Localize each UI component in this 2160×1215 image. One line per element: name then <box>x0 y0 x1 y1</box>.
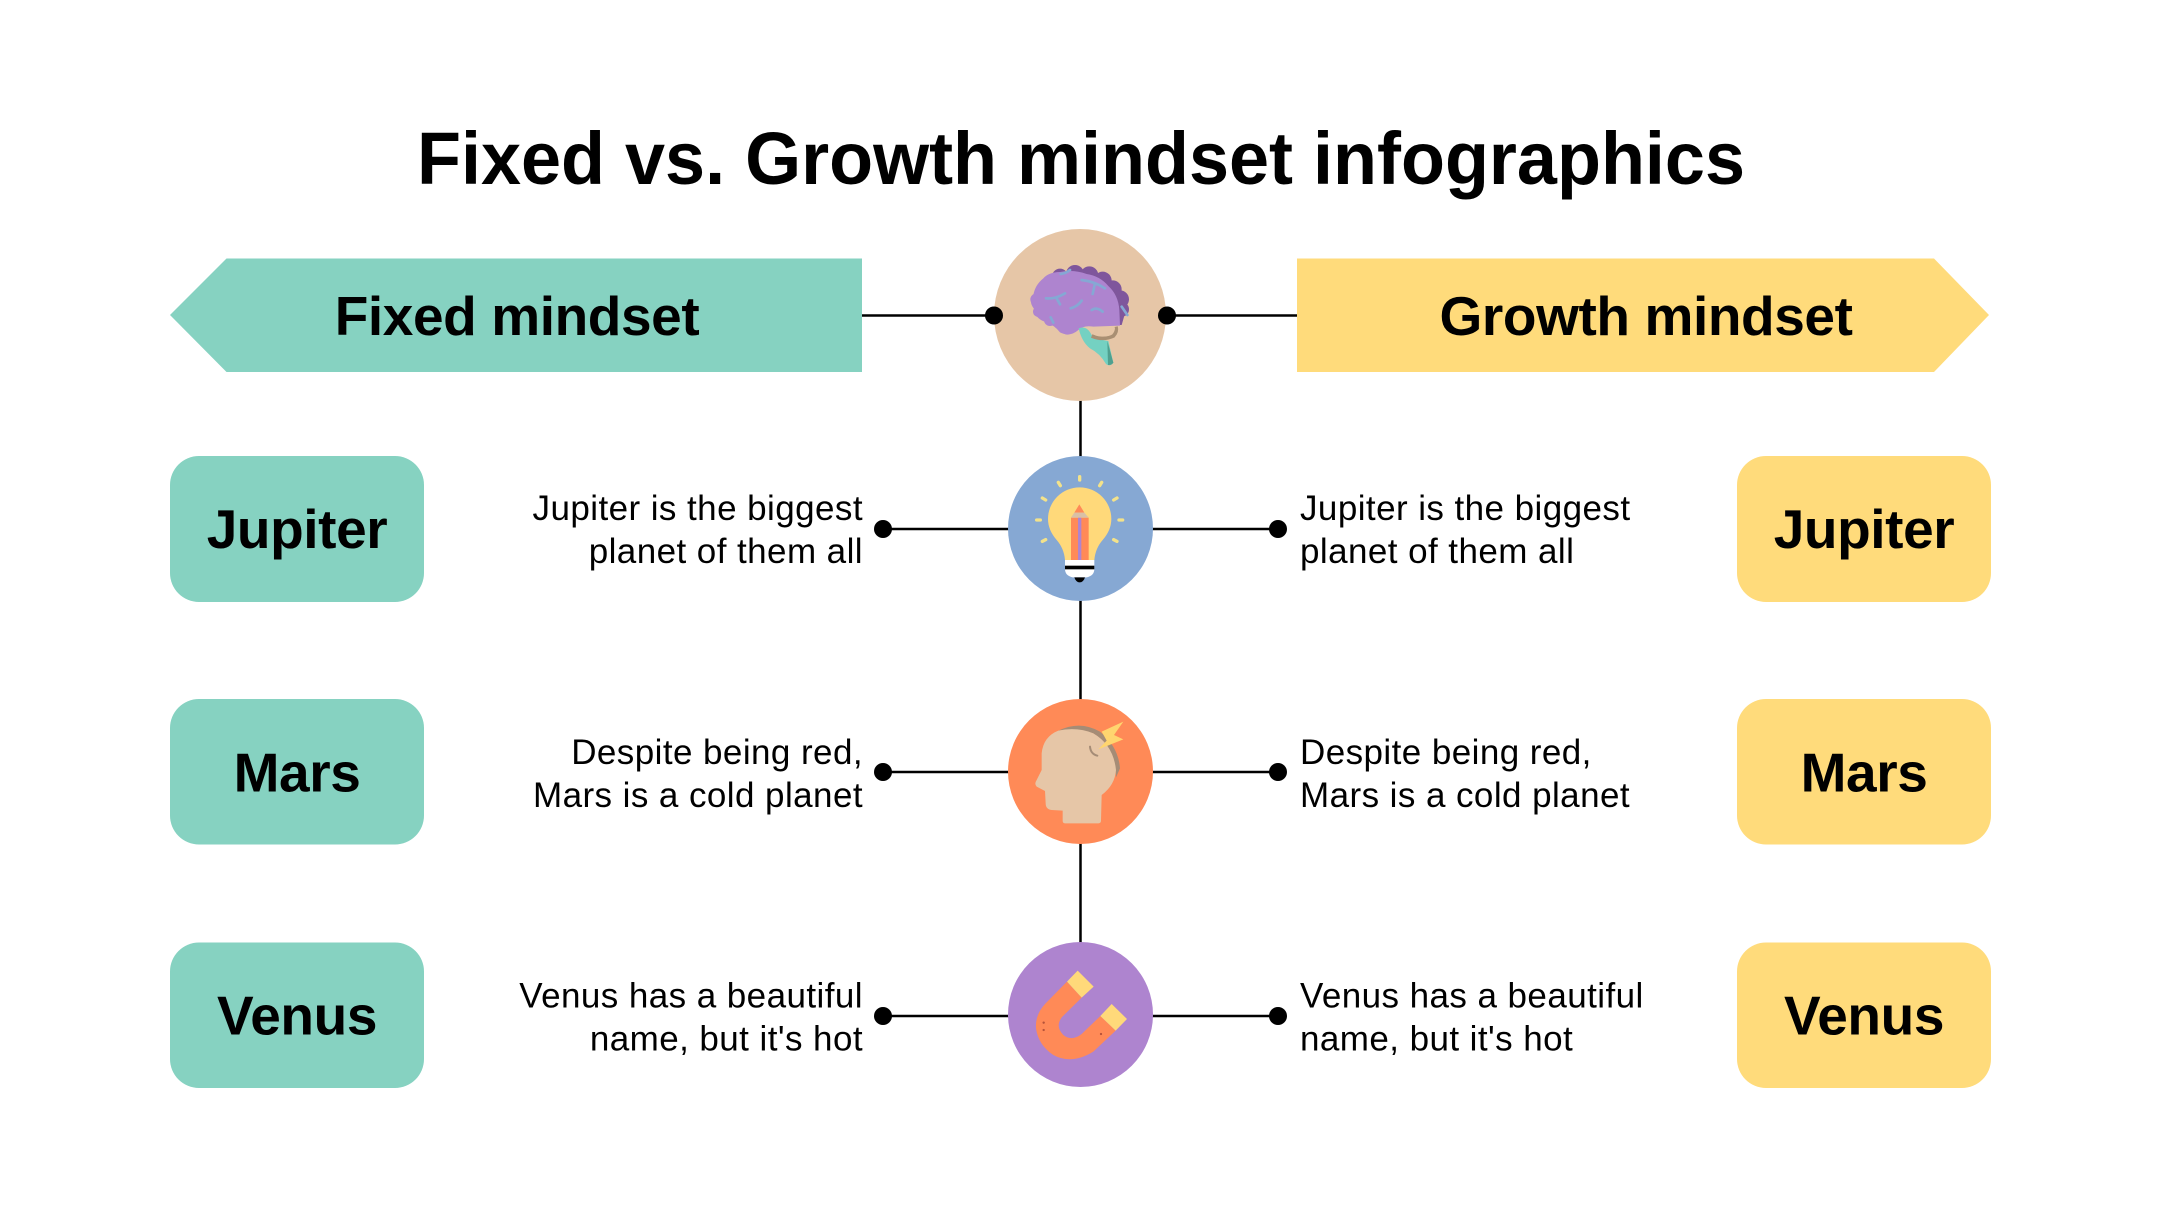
banner: growth mindset <box>1297 258 1989 372</box>
connector dots <box>874 306 1287 1025</box>
right card: Venus: Venus <box>1784 984 1944 1046</box>
right text: Mars: Despite being red, <box>1300 733 1592 772</box>
icon: head with lightning <box>1008 699 1153 844</box>
left card: Jupiter <box>170 456 424 602</box>
right text: Jupiter: Jupiter is the biggest <box>1300 489 1630 528</box>
icon: magnet <box>1008 942 1153 1087</box>
left card: Venus: Venus <box>217 984 377 1046</box>
left text: Jupiter: Jupiter is the biggest <box>533 489 863 528</box>
right text: Mars: Mars is a cold planet <box>1300 776 1630 815</box>
banner: fixed mindset: Fixed mindset <box>335 285 699 347</box>
left card: Mars <box>170 699 424 844</box>
icon: brain <box>994 229 1166 401</box>
right text: Jupiter: planet of them all <box>1300 532 1574 571</box>
right text: Venus: Venus has a beautiful <box>1300 976 1644 1016</box>
left card: Venus <box>170 942 424 1088</box>
icon: light bulb with pencil <box>1008 456 1153 601</box>
banner: growth mindset: Growth mindset <box>1439 285 1853 347</box>
right card: Mars: Mars <box>1801 742 1927 804</box>
left text: Mars: Despite being red, <box>571 733 863 772</box>
right card: Mars <box>1737 699 1991 844</box>
left text: Jupiter: planet of them all <box>589 532 863 571</box>
banner: fixed mindset <box>170 258 862 372</box>
left text: Venus: name, but it's hot <box>590 1020 863 1058</box>
title: Fixed vs. Growth mindset infographics <box>417 117 1745 200</box>
right card: Venus <box>1737 942 1991 1088</box>
left text: Mars: Mars is a cold planet <box>533 776 863 815</box>
left text: Venus: Venus has a beautiful <box>519 976 863 1016</box>
central connector lines <box>862 316 1297 1016</box>
right card: Jupiter <box>1737 456 1991 602</box>
left card: Jupiter: Jupiter <box>207 498 387 560</box>
right card: Jupiter: Jupiter <box>1774 498 1954 560</box>
left card: Mars: Mars <box>234 742 360 804</box>
right text: Venus: name, but it's hot <box>1300 1020 1573 1058</box>
